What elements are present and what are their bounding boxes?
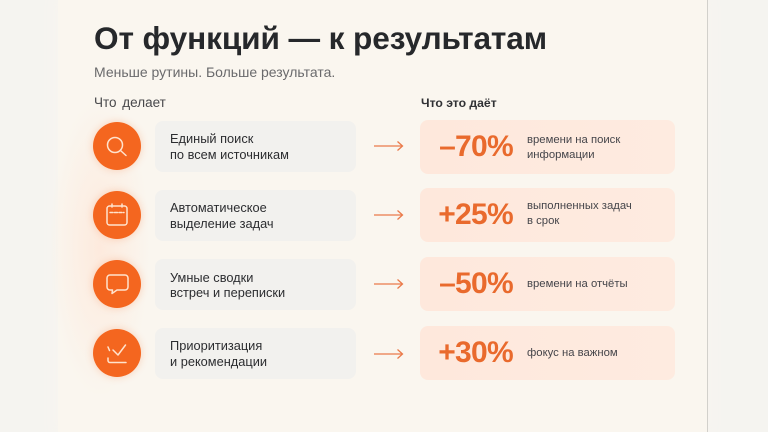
result card: в срок [527,215,559,227]
result card: фокус на важном [527,347,618,359]
result card: времени на отчёты [527,278,628,290]
row 1: unified search [90,118,675,174]
feature card [155,328,356,379]
feature card: встреч и переписки [170,285,285,300]
result card: +30% [438,336,513,369]
result card [420,188,675,242]
row 4: prioritisation [90,326,675,380]
result card [420,120,675,174]
feature card [155,259,356,310]
feature card: по всем источникам [170,146,289,162]
row 2: automatic task extraction [90,188,675,242]
result card: выполненных задач [527,200,632,212]
arrow [374,141,404,151]
icon: calendar [93,191,141,239]
row 3: smart summaries [90,256,675,312]
right column heading: Что это даёт [421,96,497,110]
arrow [374,279,404,289]
result card: времени на поиск [527,134,620,146]
result card [420,257,675,311]
feature card: и рекомендации [170,354,267,368]
left column heading: Что делает [94,95,166,110]
arrow [374,210,404,220]
result card: –70% [439,130,513,163]
title: От функций — к результатам [94,20,547,56]
subtitle: Меньше рутины. Больше результата. [94,64,335,80]
result card: +25% [438,198,513,231]
result card: –50% [439,267,513,300]
icon: checkmark [93,329,141,377]
result card: информации [527,149,595,161]
icon: speech bubble [93,260,141,308]
feature card: Автоматическое [170,200,267,215]
feature card: Приоритизация [170,338,262,353]
feature card [155,190,356,241]
feature card: Единый поиск [170,131,253,146]
feature card: Умные сводки [170,270,253,284]
icon: magnifier [93,122,141,170]
result card [420,326,675,380]
arrow [374,349,404,359]
feature card: выделение задач [170,216,274,230]
feature card [155,121,356,172]
